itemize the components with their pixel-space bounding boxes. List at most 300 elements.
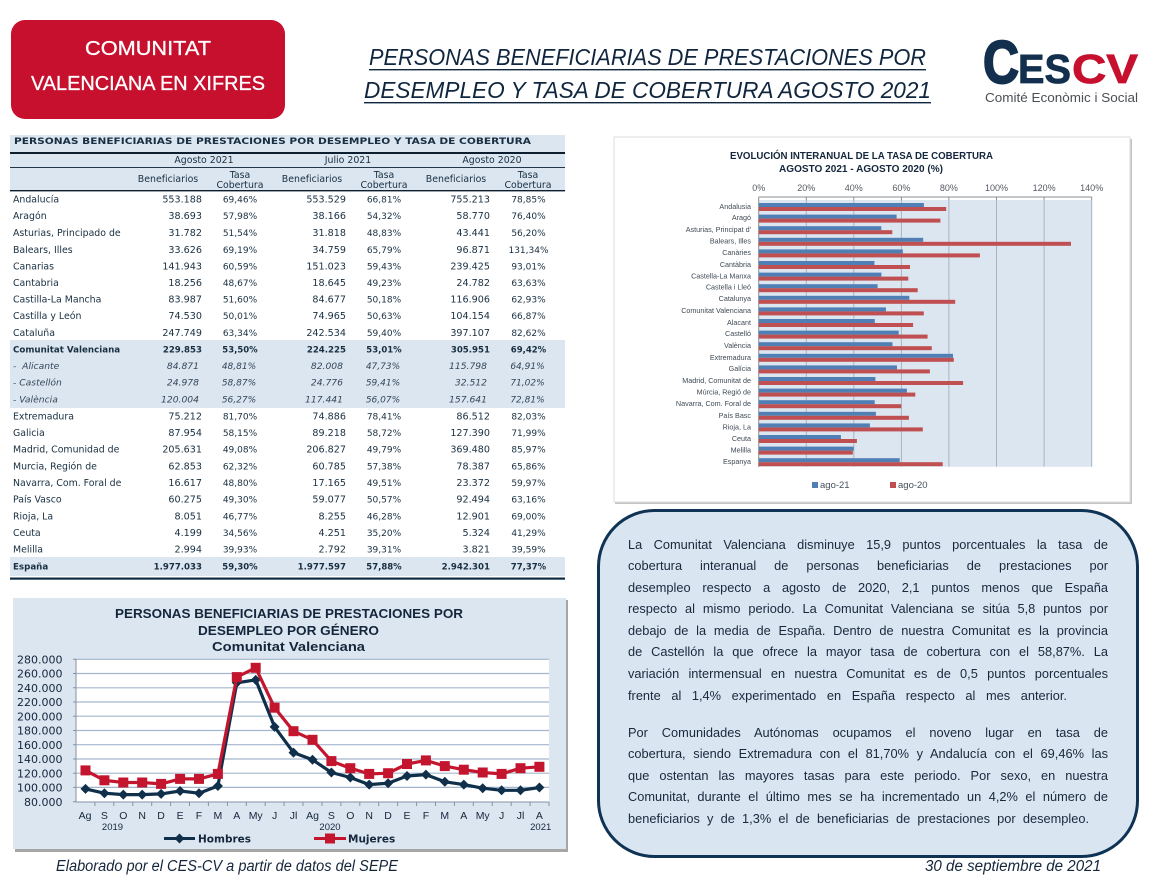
table column: tasa agosto 2020: 63,63% <box>511 279 546 289</box>
table column headers: Beneficiarios <box>138 174 198 185</box>
bar chart legend: ago-20 <box>898 480 928 491</box>
table column: beneficiarios agosto 2020: 397.107 <box>450 328 490 339</box>
table column: tasa agosto 2021: 51,60% <box>223 296 258 306</box>
table column: tasa julio 2021: 66,81% <box>367 196 402 206</box>
logo: CES CV: C <box>983 29 1019 96</box>
table column: beneficiarios agosto 2021: 8.051 <box>175 512 202 522</box>
x axis labels: A <box>536 810 543 822</box>
line chart heading: DESEMPLEO POR GÉNERO <box>198 623 379 638</box>
table column: beneficiarios agosto 2020: 92.494 <box>456 494 490 506</box>
text: cobertura interanual de personas beneficiarias de prestaciones por <box>628 558 1108 573</box>
bar chart category labels: Canàries <box>722 248 751 257</box>
table column: tasa julio 2021: 49,51% <box>367 479 402 489</box>
table column: beneficiarios julio 2021: 117.441 <box>305 394 343 406</box>
table column: tasa agosto 2021: 46,77% <box>223 512 258 522</box>
table region names: - Castellón <box>13 378 62 388</box>
x axis labels: O <box>346 810 354 822</box>
table column: tasa agosto 2021: 69,19% <box>223 246 258 256</box>
table column: tasa julio 2021: 58,72% <box>367 429 402 439</box>
table column: tasa agosto 2021: 58,15% <box>223 429 258 439</box>
table column: beneficiarios julio 2021: 89.218 <box>312 428 346 439</box>
table column: tasa julio 2021: 50,57% <box>367 496 402 506</box>
table column: beneficiarios agosto 2020: 369.480 <box>450 444 490 456</box>
table column: beneficiarios agosto 2020: 96.871 <box>456 245 490 256</box>
table column: beneficiarios agosto 2021: 1.977.033 <box>154 562 202 572</box>
y axis labels: 100.000 <box>17 782 62 795</box>
text: variación intermensual en nuestra Comunitat es de 0,5 puntos porcentuales <box>628 666 1108 680</box>
table column: beneficiarios julio 2021: 82.008 <box>311 361 343 372</box>
table column: beneficiarios agosto 2020: 86.512 <box>456 412 490 422</box>
table column: beneficiarios agosto 2021: 74.530 <box>168 311 202 322</box>
bar chart category labels: Asturias, Principat d' <box>686 225 752 234</box>
table column: tasa julio 2021: 57,88% <box>366 562 402 572</box>
table column: beneficiarios agosto 2021: 229.853 <box>163 346 202 356</box>
table region names: Melilla <box>13 544 43 556</box>
table region names: Castilla y León <box>13 311 81 322</box>
table region names: España <box>13 562 48 572</box>
table column: tasa julio 2021: 65,79% <box>367 246 402 256</box>
bar chart x axis labels: 20% <box>797 183 815 193</box>
table column: tasa julio 2021: 50,63% <box>367 312 402 322</box>
line chart heading: PERSONAS BENEFICIARIAS DE PRESTACIONES POR <box>115 606 464 621</box>
legend: Mujeres <box>314 834 395 846</box>
bar chart plot background and grid <box>759 197 1092 467</box>
x axis labels <box>79 810 551 833</box>
table column: beneficiarios julio 2021: 84.677 <box>312 294 346 306</box>
table column: tasa agosto 2021: 34,56% <box>223 529 258 539</box>
table column: beneficiarios agosto 2021: 31.782 <box>168 228 202 239</box>
series: Mujeres <box>86 668 539 784</box>
table column headers: Julio 2021 <box>324 155 371 166</box>
table column: tasa agosto 2020: 66,87% <box>511 312 546 322</box>
table column: beneficiarios agosto 2021: 553.188 <box>162 194 202 206</box>
table column: tasa julio 2021: 35,20% <box>367 529 402 539</box>
title: DESEMPLEO Y TASA DE COBERTURA AGOSTO 2021 <box>364 77 931 103</box>
table column: tasa agosto 2021: 58,87% <box>222 378 256 388</box>
table column: beneficiarios agosto 2021: 83.987 <box>168 294 202 306</box>
table column: beneficiarios agosto 2020: 104.154 <box>450 311 490 322</box>
table column: tasa julio 2021: 50,18% <box>367 296 402 306</box>
table column: tasa agosto 2021: 49,30% <box>223 496 258 506</box>
table column: beneficiarios agosto 2020: 115.798 <box>449 361 487 372</box>
table column headers: Tasa <box>373 170 394 181</box>
x axis labels: S <box>101 810 108 822</box>
table column: beneficiarios julio 2021: 553.529 <box>306 194 346 206</box>
bar chart x axis labels: 40% <box>845 183 863 193</box>
table column: beneficiarios agosto 2021: 141.943 <box>162 261 202 272</box>
table column: tasa agosto 2020: 59,97% <box>511 479 546 489</box>
table column: beneficiarios agosto 2020: 24.782 <box>456 278 490 289</box>
table column: tasa agosto 2021: 60,59% <box>223 262 258 272</box>
table column headers: Agosto 2020 <box>462 155 522 166</box>
table column: beneficiarios agosto 2020: 157.641 <box>449 394 487 406</box>
table column: tasa julio 2021: 56,07% <box>366 396 400 406</box>
bars: ago-21 <box>759 203 953 462</box>
data table <box>10 135 565 580</box>
table column: tasa julio 2021: 59,43% <box>367 262 402 272</box>
x axis labels: 2020 <box>319 822 341 833</box>
table column: beneficiarios agosto 2020: 2.942.301 <box>442 562 490 572</box>
bar chart category labels: Aragó <box>732 213 751 222</box>
x axis labels: Jl <box>517 810 524 822</box>
table column: beneficiarios agosto 2020: 12.901 <box>456 512 490 522</box>
table column: beneficiarios agosto 2020: 5.324 <box>463 528 490 539</box>
footer: source: Elaborado por el CES-CV a partir de datos del SEPE <box>56 858 399 875</box>
y axis labels: 280.000 <box>17 654 62 666</box>
table column: beneficiarios julio 2021: 38.166 <box>312 211 346 222</box>
table column: tasa agosto 2020: 71,02% <box>510 378 545 388</box>
bar chart category labels <box>676 202 752 466</box>
bar chart x axis labels: 100% <box>985 183 1008 193</box>
table column: tasa agosto 2021: 48,67% <box>223 279 258 289</box>
table region names: Navarra, Com. Foral de <box>13 478 122 489</box>
table column: tasa agosto 2021: 63,34% <box>223 329 258 339</box>
bar chart x axis labels: 60% <box>892 183 910 193</box>
bar chart category labels: Navarra, Com. Foral de <box>676 399 751 408</box>
table column: beneficiarios agosto 2021: 33.626 <box>168 245 202 256</box>
text: debajo de la media de España. Dentro de nuestra Comunitat es la provincia <box>628 622 1108 638</box>
x axis labels: Jl <box>290 810 297 822</box>
y axis labels: 200.000 <box>17 710 62 723</box>
bar chart category labels: Castella-La Manxa <box>691 271 751 280</box>
table column: beneficiarios agosto 2021: 2.994 <box>175 544 202 556</box>
table column: tasa agosto 2021: 62,32% <box>223 462 258 472</box>
table column: beneficiarios julio 2021: 151.023 <box>306 261 346 272</box>
line chart plot area <box>73 659 549 806</box>
table column: beneficiarios agosto 2020 <box>442 194 490 572</box>
y axis labels: 260.000 <box>17 668 62 681</box>
bar chart category labels: Galícia <box>729 364 751 373</box>
table column: beneficiarios julio 2021 <box>298 194 346 572</box>
text: frente al 1,4% experimentado en España respecto al mes anterior. <box>628 688 1067 702</box>
bar chart heading: EVOLUCIÓN INTERANUAL DE LA TASA DE COBERTURA <box>730 149 993 162</box>
table column: beneficiarios agosto 2020: 305.951 <box>451 346 490 356</box>
table column: beneficiarios agosto 2020: 127.390 <box>450 428 490 439</box>
bar chart category labels: Comunitat Valenciana <box>681 306 751 315</box>
x axis labels: F <box>196 810 202 822</box>
table region names: Rioja, La <box>13 512 53 522</box>
table column: beneficiarios julio 2021: 74.886 <box>312 412 346 422</box>
bar chart legend: ago-21 <box>820 480 850 491</box>
table column: beneficiarios julio 2021: 34.759 <box>312 245 346 256</box>
table region names: Cataluña <box>13 328 55 339</box>
table column: beneficiarios julio 2021: 1.977.597 <box>298 562 346 572</box>
table region names: Castilla-La Mancha <box>13 294 101 306</box>
table column: tasa agosto 2020: 69,00% <box>511 512 546 522</box>
x axis labels: D <box>384 810 392 822</box>
logo: CES CV <box>983 29 1139 105</box>
bar chart x axis labels: 80% <box>940 183 958 193</box>
table region names <box>13 194 122 572</box>
table column: beneficiarios julio 2021: 60.785 <box>312 462 346 472</box>
table column: tasa agosto 2020: 65,86% <box>511 462 546 472</box>
text: que ostentan las mayores tasas para este periodo. Por sexo, en nuestra <box>628 768 1108 782</box>
bar chart x axis labels: 120% <box>1033 183 1056 193</box>
title <box>364 44 931 103</box>
table column: tasa agosto 2020: 82,62% <box>511 329 546 339</box>
table column: beneficiarios agosto 2021 <box>154 194 202 572</box>
x axis labels: Ag <box>79 810 92 822</box>
table column: beneficiarios agosto 2021: 38.693 <box>168 211 202 222</box>
bar chart category labels: Alacant <box>727 318 751 327</box>
bar chart category labels: País Basc <box>719 411 751 420</box>
table column: beneficiarios julio 2021: 18.645 <box>312 278 346 289</box>
table column: beneficiarios agosto 2021: 62.853 <box>168 462 202 472</box>
table region names: Galicia <box>13 428 45 439</box>
table column: beneficiarios agosto 2021: 87.954 <box>168 428 202 439</box>
y axis labels: 240.000 <box>17 682 62 695</box>
table column: beneficiarios julio 2021: 206.827 <box>306 444 346 456</box>
y axis labels: 140.000 <box>17 753 62 766</box>
table column: tasa agosto 2020: 131,34% <box>508 246 549 256</box>
table column: beneficiarios julio 2021: 17.165 <box>312 478 346 489</box>
table column: tasa agosto 2020: 39,59% <box>511 546 546 556</box>
table column: tasa agosto 2021: 56,27% <box>222 396 256 406</box>
x axis labels: N <box>138 810 146 822</box>
table column: beneficiarios julio 2021: 74.965 <box>312 311 346 322</box>
table column: beneficiarios agosto 2020: 3.821 <box>463 544 490 556</box>
table column: tasa agosto 2021: 51,54% <box>223 229 258 239</box>
table column: tasa agosto 2021: 49,08% <box>223 446 258 456</box>
table column: beneficiarios julio 2021: 4.251 <box>319 528 346 539</box>
x axis labels: N <box>365 810 373 822</box>
table column: tasa julio 2021: 78,41% <box>367 412 402 422</box>
table column: tasa julio 2021: 48,83% <box>367 229 402 239</box>
x axis labels: S <box>328 810 335 822</box>
table column: tasa agosto 2021: 81,70% <box>223 412 258 422</box>
table column: beneficiarios julio 2021: 242.534 <box>306 328 346 339</box>
x axis labels: E <box>403 810 411 822</box>
table region names: Cantabria <box>13 278 59 289</box>
table column: tasa julio 2021: 46,28% <box>367 512 402 522</box>
bar chart category labels: Melilla <box>731 445 751 454</box>
table column: tasa julio 2021: 59,41% <box>366 378 400 388</box>
table column headers: Cobertura <box>360 180 408 191</box>
table column: beneficiarios agosto 2021: 84.871 <box>167 361 199 372</box>
bar chart category labels: Extremadura <box>710 353 751 362</box>
x axis labels: My <box>249 810 263 822</box>
table region names: Balears, Illes <box>13 245 73 256</box>
series: Hombres <box>86 680 539 795</box>
table column: tasa agosto 2020: 63,16% <box>511 496 546 506</box>
logo: CES CV: CV <box>1072 46 1139 92</box>
table column: tasa agosto 2020: 78,85% <box>511 196 546 206</box>
table column: beneficiarios agosto 2021: 4.199 <box>175 528 202 539</box>
table column: beneficiarios agosto 2021: 247.749 <box>162 328 202 339</box>
bar chart x axis labels: 0% <box>752 183 765 193</box>
table column: beneficiarios julio 2021: 2.792 <box>319 544 346 556</box>
bar chart category labels: Andalusia <box>719 202 751 211</box>
x axis labels: D <box>157 810 165 822</box>
table region names: Canarias <box>13 261 54 272</box>
line chart heading: Comunitat Valenciana <box>212 639 366 654</box>
table column: tasa agosto 2021: 53,50% <box>222 346 258 356</box>
x axis labels: F <box>423 810 429 822</box>
table column: beneficiarios agosto 2020: 755.213 <box>450 194 490 206</box>
badge: Comunitat Valenciana en xifres: VALENCIANA EN XIFRES <box>31 72 265 95</box>
table column headers <box>138 155 552 191</box>
badge: Comunitat Valenciana en xifres: COMUNITAT <box>85 37 211 60</box>
table region names: Madrid, Comunidad de <box>13 444 120 456</box>
table column: beneficiarios julio 2021: 59.077 <box>312 494 346 506</box>
table column: beneficiarios agosto 2020: 116.906 <box>450 294 490 306</box>
table column headers: Tasa <box>517 170 538 181</box>
table column: tasa julio 2021: 59,40% <box>367 329 402 339</box>
table region names: Extremadura <box>13 412 74 422</box>
bar chart heading: AGOSTO 2021 - AGOSTO 2020 (%) <box>779 163 943 175</box>
x axis labels: A <box>460 810 467 822</box>
text: Comunitat, durante el último mes se ha incrementado un 4,2% el número de <box>628 789 1108 804</box>
bar chart legend <box>812 480 928 491</box>
y axis labels: 120.000 <box>17 767 62 780</box>
bar chart heading <box>730 149 993 175</box>
table column: tasa agosto 2020: 72,81% <box>510 396 545 406</box>
x axis labels: J <box>499 810 504 822</box>
text: beneficiarios y de 1,3% el de beneficiarias de prestaciones por desempleo. <box>628 810 1089 826</box>
y axis labels: 220.000 <box>17 696 62 709</box>
footer: date: 30 de septiembre de 2021 <box>925 858 1101 875</box>
table column: beneficiarios agosto 2020: 239.425 <box>450 261 490 272</box>
table column: beneficiarios julio 2021: 31.818 <box>312 228 346 239</box>
bar chart x axis labels: 140% <box>1080 183 1103 193</box>
table column: tasa agosto 2021: 69,46% <box>223 196 258 206</box>
table column: tasa julio 2021: 57,38% <box>367 462 402 472</box>
table column: beneficiarios julio 2021: 224.225 <box>307 346 346 356</box>
table column: tasa agosto 2021: 50,01% <box>223 312 258 322</box>
table column: tasa julio 2021: 49,23% <box>367 279 402 289</box>
x axis labels: O <box>119 810 127 822</box>
table column: tasa agosto 2020: 69,42% <box>511 346 547 356</box>
table column: beneficiarios agosto 2021: 75.212 <box>168 412 202 422</box>
table column: tasa agosto 2020: 82,03% <box>511 412 546 422</box>
table region names: País Vasco <box>13 494 62 506</box>
bar chart category labels: València <box>724 341 751 350</box>
table column: tasa julio 2021: 53,01% <box>366 346 402 356</box>
text: cobertura, siendo Extremadura con el 81,70% y Andalucía con el 69,46% las <box>628 746 1108 761</box>
table column: tasa julio 2021: 47,73% <box>366 362 400 372</box>
x axis labels: 2019 <box>102 822 123 833</box>
table column: tasa agosto 2020: 64,91% <box>510 362 545 372</box>
text: La Comunitat Valenciana disminuye 15,9 puntos porcentuales la tasa de <box>628 536 1108 552</box>
table column: tasa agosto 2021: 48,81% <box>222 362 256 372</box>
table column: beneficiarios agosto 2020: 43.441 <box>456 228 490 239</box>
x axis labels: M <box>214 810 222 822</box>
table column: beneficiarios agosto 2021: 16.617 <box>168 478 202 489</box>
commentary text <box>628 536 1108 826</box>
table column: tasa agosto 2020: 85,97% <box>511 446 546 456</box>
panel: commentary background <box>598 510 1138 856</box>
table heading: PERSONAS BENEFICIARIAS DE PRESTACIONES POR DESEMPLEO Y TASA DE COBERTURA <box>14 137 531 147</box>
x axis labels: E <box>177 810 184 822</box>
table column: tasa agosto 2020: 71,99% <box>511 429 546 439</box>
table column: tasa agosto 2020: 41,29% <box>511 529 546 539</box>
panel: line chart by gender <box>13 598 568 852</box>
bar chart category labels: Madrid, Comunitat de <box>682 376 751 385</box>
bar chart category labels: Balears, Illes <box>710 236 751 245</box>
text: desempleo respecto a agosto de 2020, 2,1 puntos menos que España <box>628 580 1108 594</box>
y axis labels: 180.000 <box>17 725 62 738</box>
x axis labels: Ag <box>306 810 319 822</box>
line chart heading <box>115 606 464 654</box>
table column: tasa agosto 2021: 39,93% <box>223 546 258 556</box>
bar chart x axis labels <box>752 183 1103 193</box>
logo: CES CV: ES <box>1018 46 1071 92</box>
table region names: Andalucía <box>13 194 59 206</box>
table column: tasa julio 2021 <box>366 196 402 572</box>
bar chart category labels: Ceuta <box>732 434 751 443</box>
x axis labels: J <box>272 810 277 822</box>
table column: tasa agosto 2021 <box>222 196 258 572</box>
table column: beneficiarios agosto 2020: 23.372 <box>456 478 490 489</box>
y axis labels: 80.000 <box>24 796 62 809</box>
bar chart category labels: Cantàbria <box>720 260 751 269</box>
x axis labels: My <box>476 810 490 822</box>
table column: tasa agosto 2020: 77,37% <box>511 562 547 572</box>
table column: beneficiarios agosto 2021: 24.978 <box>167 378 199 388</box>
logo: CES CV: Comité Econòmic i Social <box>985 90 1138 105</box>
bar chart category labels: Castella i Lleó <box>706 283 751 292</box>
table region names: - València <box>13 394 58 406</box>
panel: coverage rate bar chart <box>614 137 1132 504</box>
bar chart category labels: Catalunya <box>719 294 751 303</box>
legend: Hombres <box>164 834 251 846</box>
table column: beneficiarios agosto 2020: 58.770 <box>456 211 490 222</box>
bar chart category labels: Espanya <box>723 457 751 466</box>
table column headers: Cobertura <box>504 180 552 191</box>
table column headers: Tasa <box>229 170 250 181</box>
table column: tasa agosto 2021: 59,30% <box>222 562 258 572</box>
table region names: - Alicante <box>13 361 60 372</box>
table column: tasa agosto 2020 <box>508 196 549 572</box>
table column: tasa agosto 2020: 93,01% <box>511 262 546 272</box>
table column headers: Agosto 2021 <box>174 155 234 166</box>
y axis labels <box>17 654 62 809</box>
bar chart category labels: Múrcia, Regió de <box>697 387 751 396</box>
table column: beneficiarios agosto 2020: 78.387 <box>456 462 490 472</box>
legend: Hombres: Hombres <box>198 834 251 846</box>
text: respecto al mismo periodo. La Comunitat Valenciana se sitúa 5,8 puntos por <box>628 601 1108 616</box>
text: Por Comunidades Autónomas ocupamos el noveno lugar en tasa de <box>628 724 1108 740</box>
table column headers: Cobertura <box>216 180 264 191</box>
badge: Comunitat Valenciana en xifres <box>11 20 285 119</box>
title: PERSONAS BENEFICIARIAS DE PRESTACIONES POR <box>369 44 926 70</box>
table column headers: Beneficiarios <box>426 174 486 185</box>
table column: tasa julio 2021: 54,32% <box>367 212 402 222</box>
table column: beneficiarios agosto 2021: 18.256 <box>168 278 202 289</box>
bar chart category labels: Castelló <box>725 329 751 338</box>
table column: tasa julio 2021: 39,31% <box>367 546 402 556</box>
y axis labels: 160.000 <box>17 739 62 752</box>
table column: beneficiarios julio 2021: 24.776 <box>311 378 343 388</box>
table column: beneficiarios agosto 2021: 120.004 <box>161 394 199 406</box>
table column: beneficiarios agosto 2021: 60.275 <box>168 494 202 506</box>
x axis labels: M <box>440 810 449 822</box>
x axis labels: 2021 <box>530 822 551 833</box>
text: de Castellón la que ofrece la mayor tasa de cobertura con el 58,87%. La <box>628 644 1108 659</box>
table region names: Aragón <box>13 211 47 222</box>
table region names: Ceuta <box>13 528 41 539</box>
table column headers: Beneficiarios <box>282 174 342 185</box>
table column: tasa agosto 2021: 57,98% <box>223 212 258 222</box>
table column: beneficiarios agosto 2020: 32.512 <box>455 378 487 388</box>
legend: Mujeres: Mujeres <box>348 834 395 846</box>
table column: beneficiarios agosto 2021: 205.631 <box>162 444 202 456</box>
table column: tasa agosto 2021: 48,80% <box>223 479 258 489</box>
bar chart category labels: Rioja, La <box>723 422 751 431</box>
table column: tasa agosto 2020: 76,40% <box>511 212 546 222</box>
bars: ago-20 <box>759 207 1071 466</box>
table region names: Comunitat Valenciana <box>13 346 120 356</box>
